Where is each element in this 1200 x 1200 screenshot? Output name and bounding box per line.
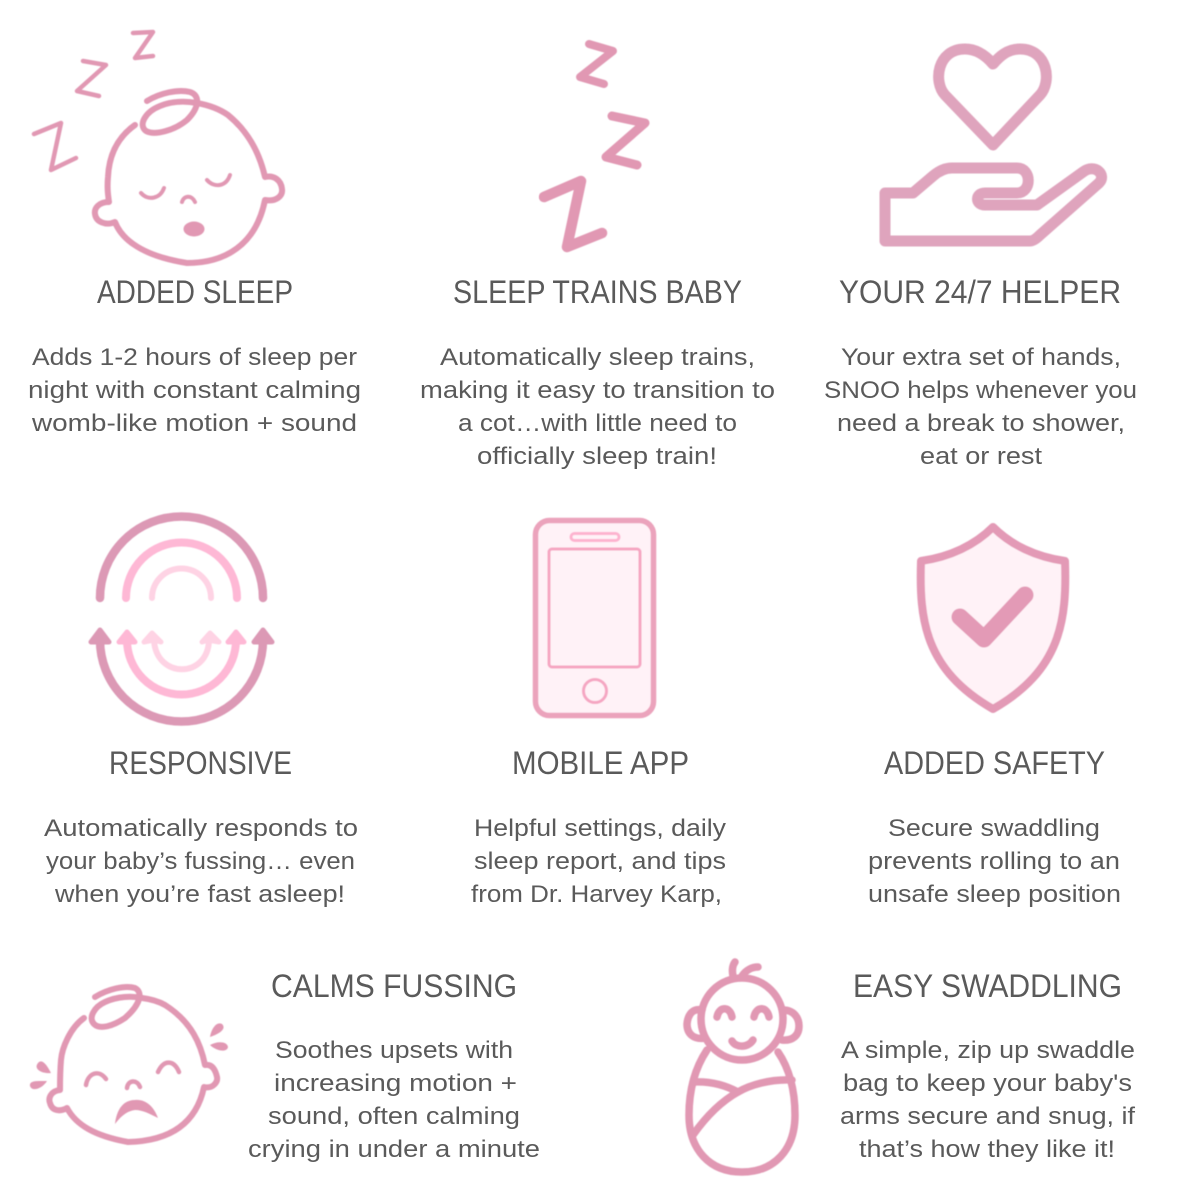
text: added sleep description: night with constant calming [28, 377, 361, 404]
icon: swaddled baby [687, 962, 799, 1172]
heading: added safety: ADDED SAFETY [884, 745, 1105, 781]
text: easy swaddling description: arms secure and snug, if [840, 1103, 1135, 1130]
text: your 24/7 helper description: need a break to shower, [837, 410, 1125, 437]
icon: crying baby [30, 987, 228, 1142]
text: calms fussing description [248, 1037, 540, 1163]
heading: easy swaddling: EASY SWADDLING [853, 968, 1122, 1004]
icon: crying mouth [115, 1100, 158, 1124]
text: sleep trains baby description: making it easy to transition to [420, 377, 775, 404]
text: added safety description: prevents rolling to an [868, 848, 1120, 875]
text: added safety description: Secure swaddling [888, 815, 1100, 842]
icon: sleeping baby [34, 32, 282, 263]
text: responsive description: when you’re fast asleep! [54, 881, 345, 908]
text: added sleep description: womb-like motion + sound [31, 410, 357, 437]
panel: mobile app [471, 520, 726, 908]
text: easy swaddling description: bag to keep your baby's [843, 1070, 1132, 1097]
text: calms fussing description: increasing motion + [274, 1070, 517, 1097]
text: easy swaddling description: that’s how they like it! [859, 1136, 1115, 1163]
text: calms fussing description: Soothes upsets with [275, 1037, 513, 1064]
heading: responsive: RESPONSIVE [109, 745, 292, 781]
text: added sleep description: Adds 1-2 hours of sleep per [32, 344, 357, 371]
icon: sound and motion arcs [91, 516, 272, 721]
panel: responsive [44, 516, 358, 908]
panel: easy swaddling [687, 962, 1135, 1172]
text: responsive description [44, 815, 358, 908]
text: sleep trains baby description: a cot…with little need to [458, 410, 737, 437]
icon: tears [30, 1023, 228, 1089]
text: your 24/7 helper description: eat or rest [920, 443, 1042, 470]
icon: phone [536, 520, 654, 716]
panel: sleep trains baby [420, 44, 775, 470]
text: mobile app description: from Dr. Harvey Karp, [471, 881, 722, 908]
text: easy swaddling description: A simple, zip up swaddle [841, 1037, 1135, 1064]
panel: calms fussing [30, 968, 540, 1163]
text: your 24/7 helper description: SNOO helps whenever you [824, 377, 1137, 404]
panel: added safety [868, 527, 1121, 908]
heading: your 24/7 helper: YOUR 24/7 HELPER [839, 274, 1121, 310]
text: mobile app description [471, 815, 726, 908]
text: calms fussing description: crying in under a minute [248, 1136, 540, 1163]
text: mobile app description: sleep report, and tips [474, 848, 726, 875]
panel: added sleep [28, 32, 361, 437]
heading: added sleep: ADDED SLEEP [97, 274, 293, 310]
text: added safety description: unsafe sleep position [868, 881, 1121, 908]
icon: zzz [544, 44, 645, 247]
heading: calms fussing: CALMS FUSSING [271, 968, 517, 1004]
icon: heart over hand [885, 49, 1102, 241]
text: sleep trains baby description: officially sleep train! [477, 443, 717, 470]
text: your 24/7 helper description [824, 344, 1137, 470]
text: added safety description [868, 815, 1121, 908]
heading: mobile app: MOBILE APP [512, 745, 689, 781]
text: calms fussing description: sound, often calming [268, 1103, 520, 1130]
text: sleep trains baby description: Automatically sleep trains, [440, 344, 755, 371]
text: sleep trains baby description [420, 344, 775, 470]
text: responsive description: Automatically responds to [44, 815, 358, 842]
heading: sleep trains baby: SLEEP TRAINS BABY [453, 274, 742, 310]
icon: shield with check [921, 527, 1065, 709]
text: mobile app description: Helpful settings, daily [474, 815, 726, 842]
panel: your 24/7 helper [824, 49, 1137, 470]
text: your 24/7 helper description: Your extra set of hands, [841, 344, 1121, 371]
text: responsive description: your baby’s fussing… even [46, 848, 355, 875]
text: added sleep description [28, 344, 361, 437]
text: easy swaddling description [840, 1037, 1135, 1163]
